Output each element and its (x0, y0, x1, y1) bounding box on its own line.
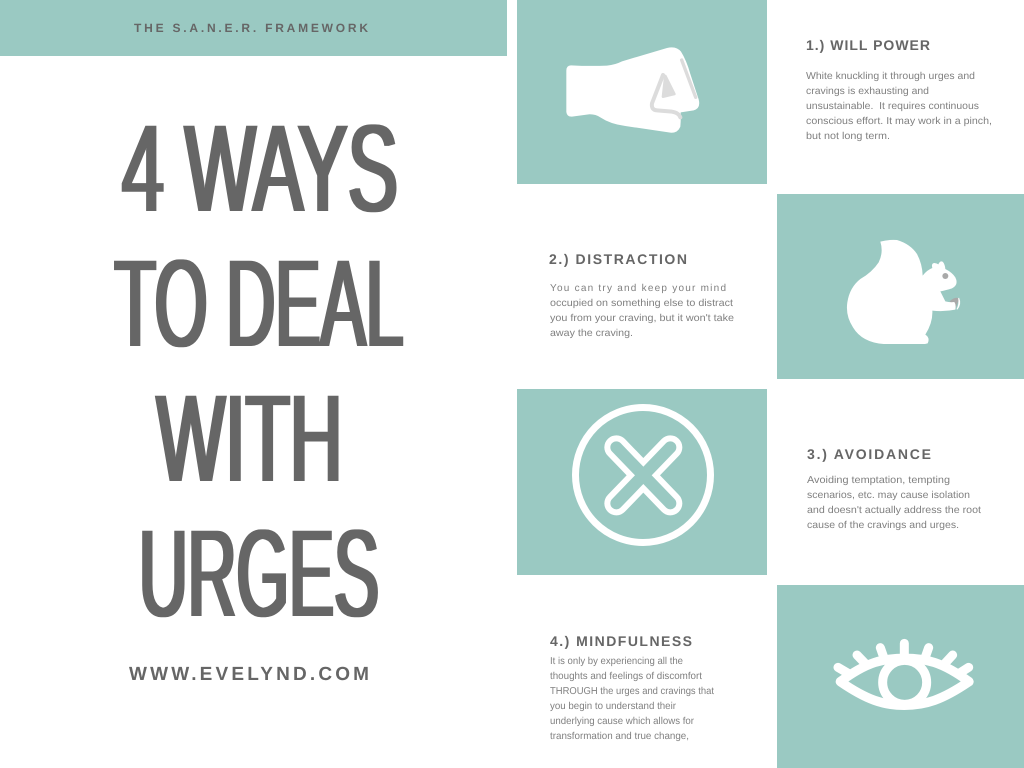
text block: will power: conscious effort. It may work in a pinch, (806, 116, 992, 127)
title: URGES (139, 505, 379, 643)
text block: distraction: occupied on something else to distract (550, 298, 733, 309)
text block: distraction (549, 251, 734, 339)
text block: will power: but not long term. (806, 131, 890, 142)
text block: distraction: 2.) DISTRACTION (549, 251, 687, 267)
panel: x icon (517, 389, 767, 575)
text block: avoidance (807, 446, 981, 531)
text block: mindfulness: It is only by experiencing all the (550, 656, 683, 667)
text block: distraction: away the craving. (550, 328, 633, 339)
panel: fist icon (517, 0, 767, 184)
header banner: THE S.A.N.E.R. FRAMEWORK (134, 21, 368, 35)
title (114, 100, 404, 643)
text block: mindfulness: transformation and true change, (550, 731, 689, 742)
panel: squirrel icon (777, 194, 1024, 379)
text block: mindfulness (550, 633, 714, 742)
title: WITH (156, 370, 342, 508)
header banner (0, 0, 507, 56)
text block: will power: White knuckling it through urges and (806, 71, 975, 82)
text block: mindfulness: you begin to understand their (550, 701, 677, 712)
title: TO DEAL (114, 235, 404, 373)
panel: eye icon (777, 585, 1024, 768)
text block: mindfulness: underlying cause which allows for (550, 716, 695, 727)
text block: mindfulness: thoughts and feelings of discomfort (550, 671, 702, 682)
text block: distraction: You can try and keep your mind (550, 283, 726, 294)
text block: will power: 1.) WILL POWER (806, 37, 930, 53)
text block: avoidance: and doesn't actually address the root (807, 505, 981, 516)
text block: mindfulness: 4.) MINDFULNESS (550, 633, 692, 649)
text block: mindfulness: THROUGH the urges and cravings that (550, 686, 714, 697)
text block: avoidance: cause of the cravings and urges. (807, 520, 959, 531)
text block: will power (806, 37, 992, 142)
website url: WWW.EVELYND.COM (129, 664, 369, 685)
text block: will power: cravings is exhausting and (806, 86, 929, 97)
text block: avoidance: Avoiding temptation, tempting (807, 475, 950, 486)
text block: distraction: you from your craving, but it won't take (550, 313, 734, 324)
text block: avoidance: scenarios, etc. may cause isolation (807, 490, 970, 501)
text block: will power: unsustainable. It requires continuous (806, 101, 979, 112)
text block: avoidance: 3.) AVOIDANCE (807, 446, 931, 462)
title: 4 WAYS (122, 100, 398, 238)
